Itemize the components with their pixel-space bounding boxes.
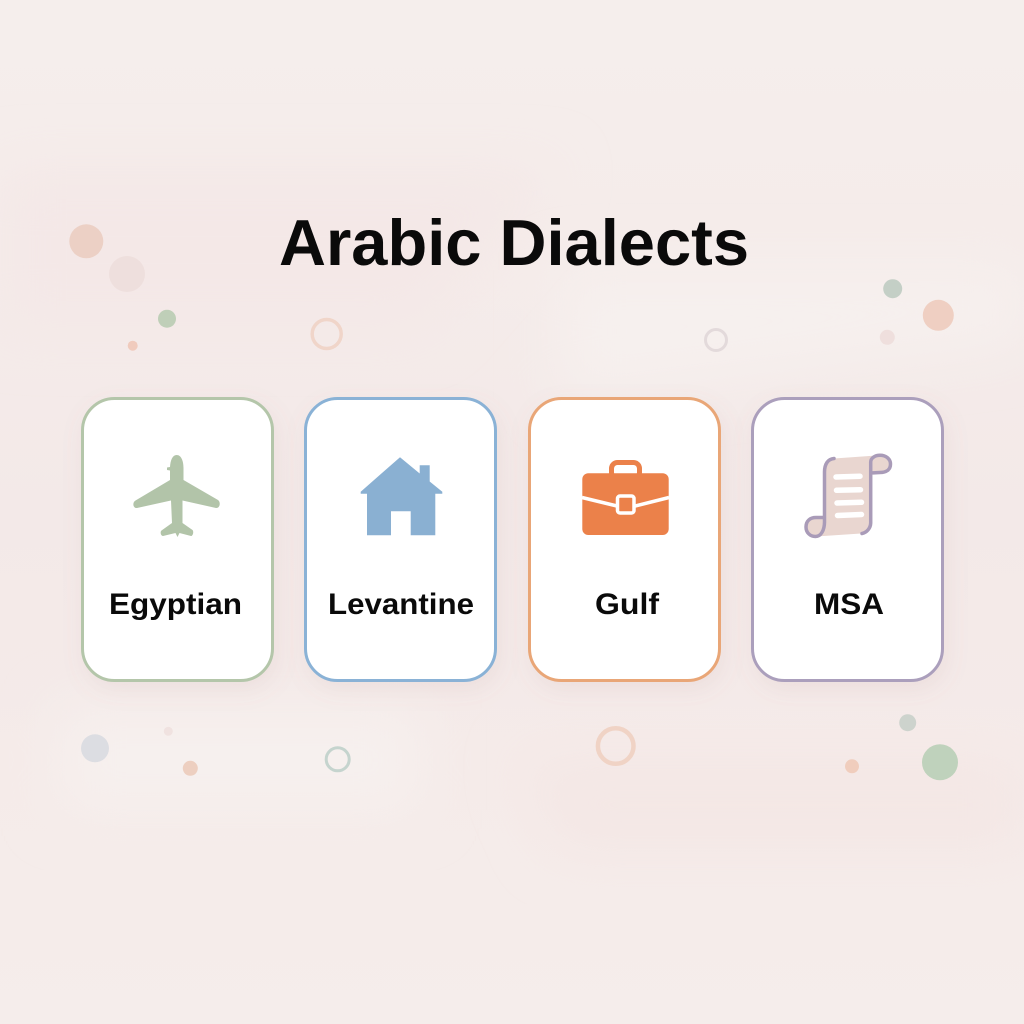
- label: Gulf: Gulf: [595, 588, 660, 621]
- decorative dots: lower right: [598, 714, 958, 780]
- panel: Levantine: [306, 398, 496, 680]
- icon: briefcase: [582, 462, 669, 535]
- label: Egyptian: Egyptian: [109, 588, 242, 621]
- icon: house: [361, 457, 442, 535]
- panel: Egyptian: [82, 398, 272, 680]
- decorative dots: lower left: [81, 727, 349, 776]
- icon: airplane: [133, 455, 220, 537]
- title: Arabic Dialects: [279, 206, 749, 279]
- panel: Gulf: [530, 398, 720, 680]
- decorative dots: upper left: [69, 224, 341, 351]
- decorative dots: upper right: [706, 279, 954, 350]
- panel: MSA: [752, 398, 942, 680]
- label: MSA: MSA: [814, 588, 884, 621]
- label: Levantine: Levantine: [328, 588, 474, 621]
- icon: scroll: [806, 455, 890, 536]
